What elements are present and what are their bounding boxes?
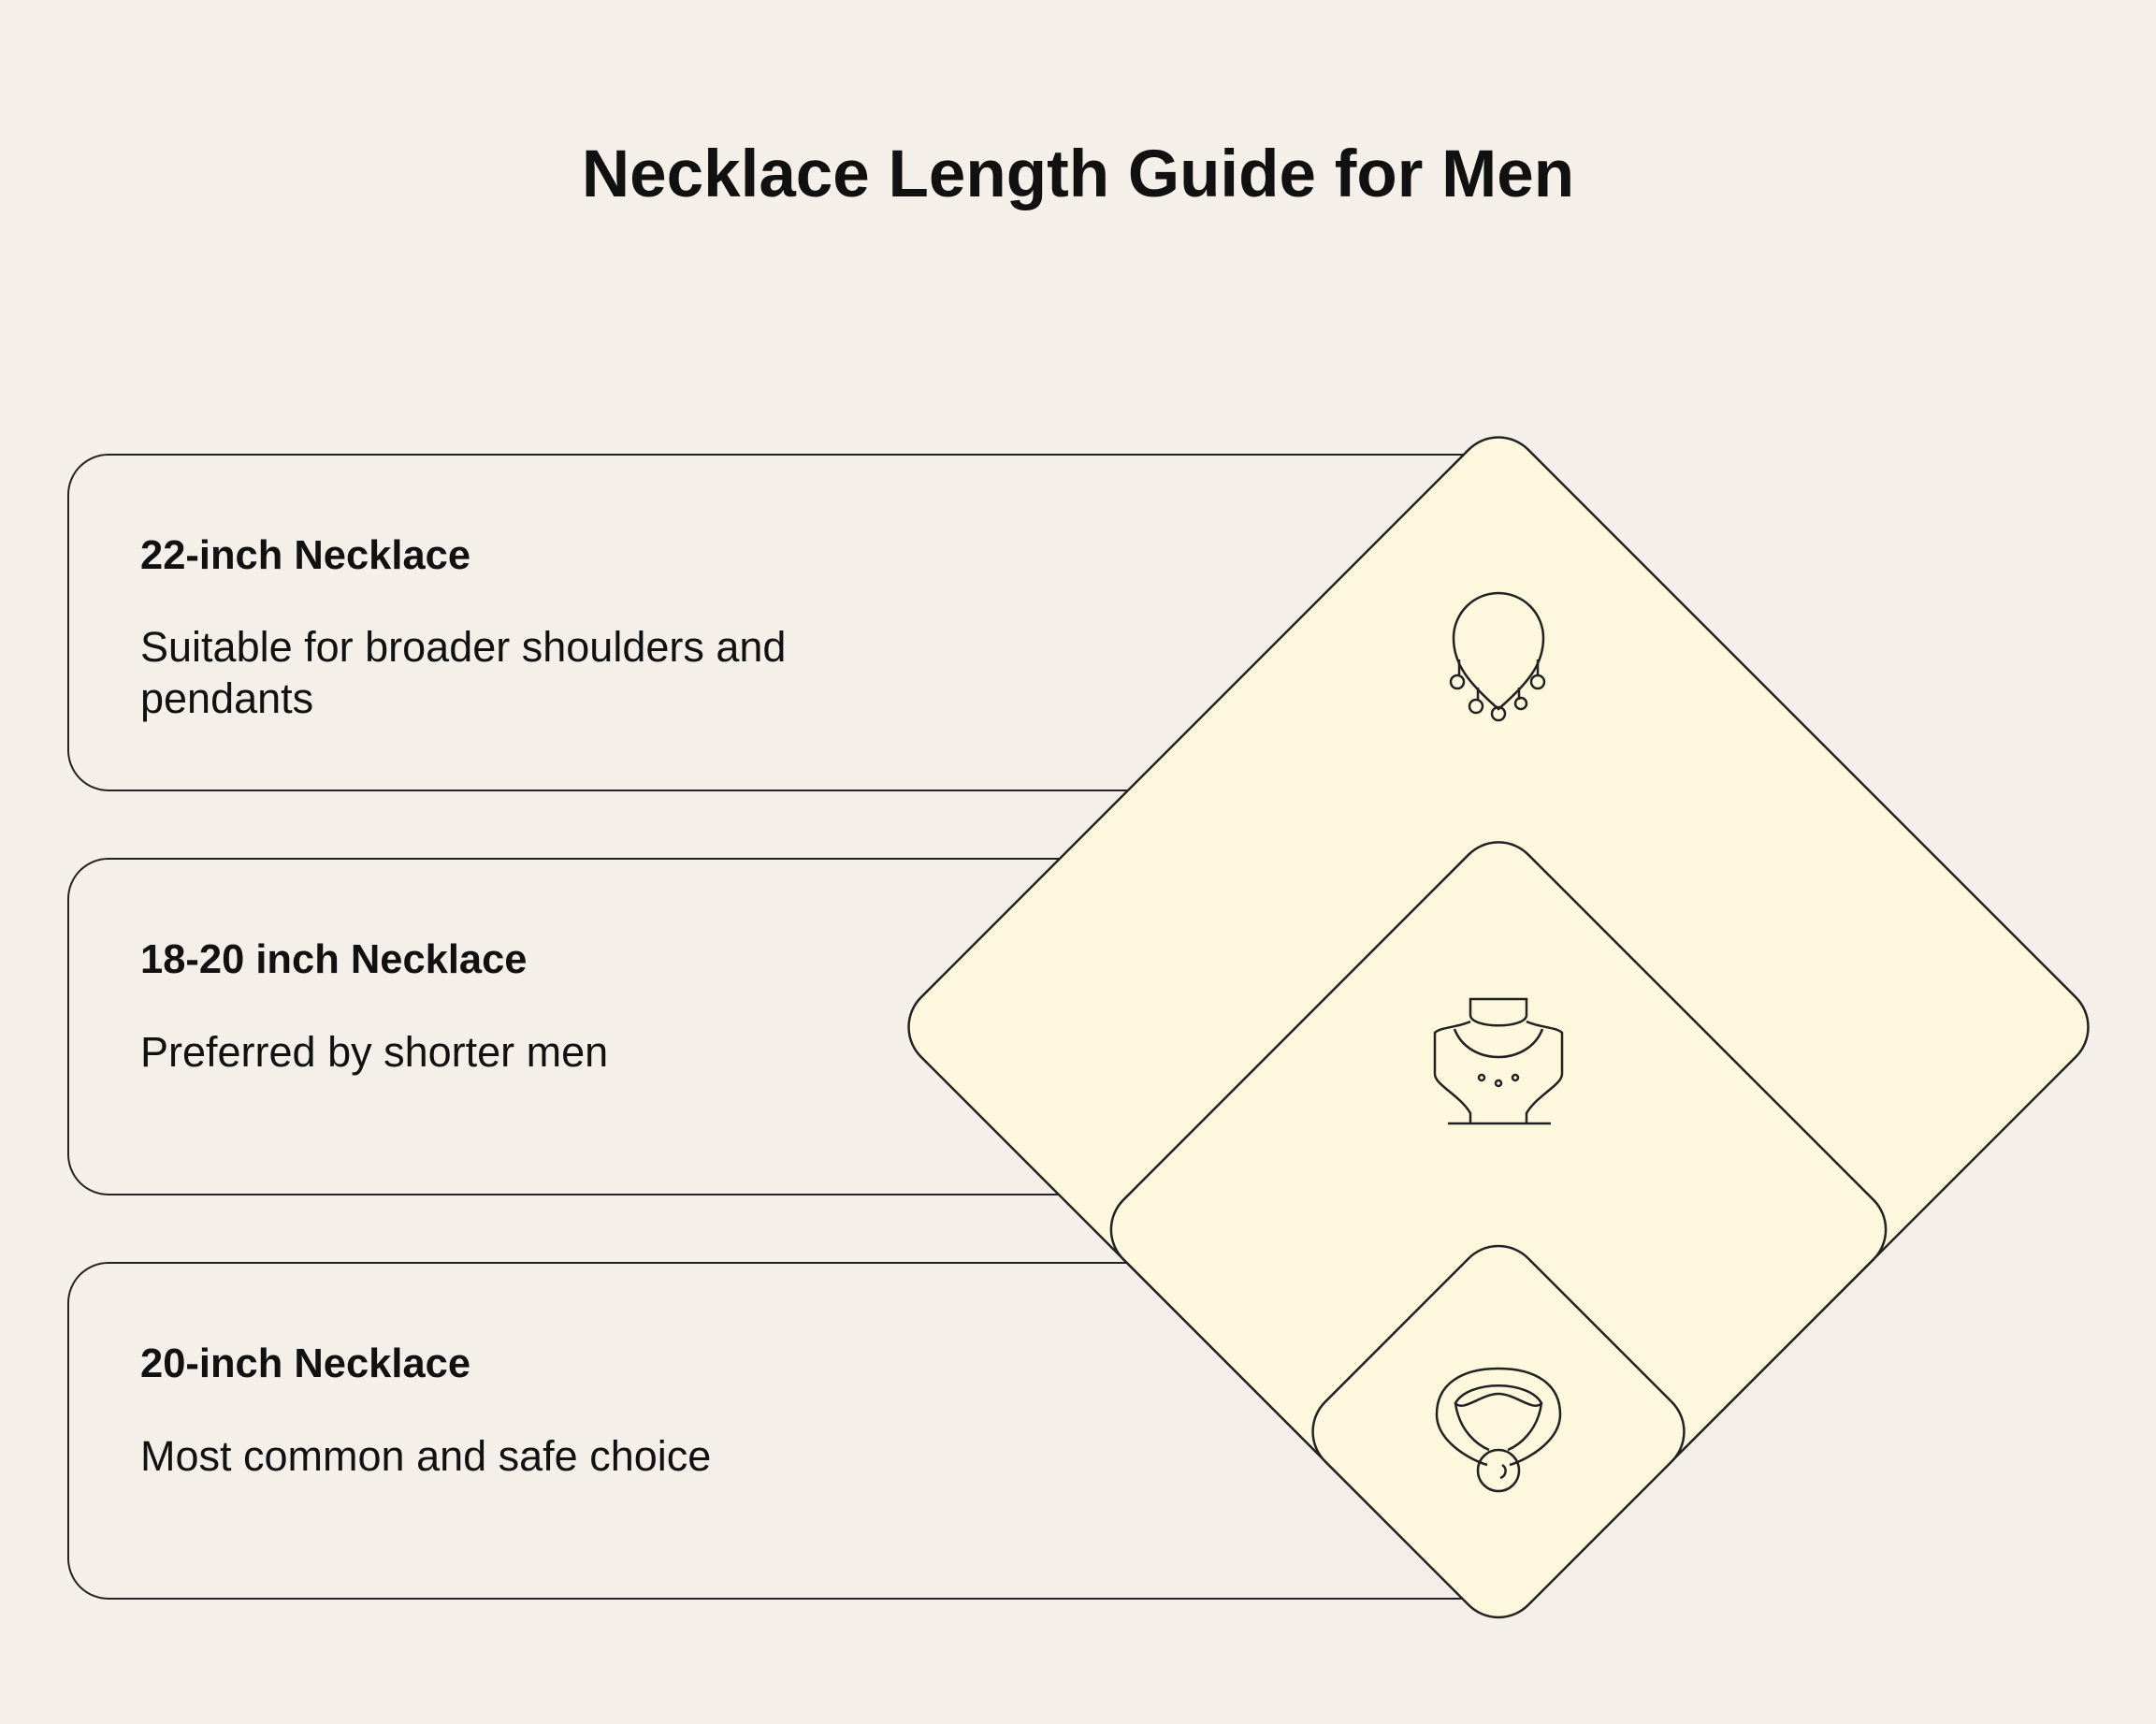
panel: 20-inch	[67, 1262, 1527, 1600]
icon: bust with necklace	[1435, 999, 1562, 1123]
text: 22-inch	[140, 623, 786, 722]
diamond: small	[1295, 1228, 1701, 1635]
diamond: middle	[1093, 825, 1903, 1634]
text: 22-inch: Suitable for broader shoulders and	[140, 623, 786, 671]
title: Necklace Length Guide for Men	[582, 138, 1574, 211]
text: 18-20: Preferred by shorter men	[140, 1028, 608, 1076]
diamond: large	[891, 420, 2105, 1634]
panel: 22-inch	[67, 454, 1527, 791]
panel: 18-20 inch	[67, 858, 1527, 1195]
heading: 18-20: 18-20 inch Necklace	[140, 937, 528, 982]
heading: 20-inch: 20-inch Necklace	[140, 1341, 470, 1386]
icon: pendant necklace	[1451, 593, 1544, 720]
text: 20-inch: Most common and safe choice	[140, 1432, 711, 1480]
text: 22-inch: pendants	[140, 674, 313, 722]
heading: 22-inch: 22-inch Necklace	[140, 533, 470, 578]
icon: choker pendant	[1437, 1369, 1560, 1491]
